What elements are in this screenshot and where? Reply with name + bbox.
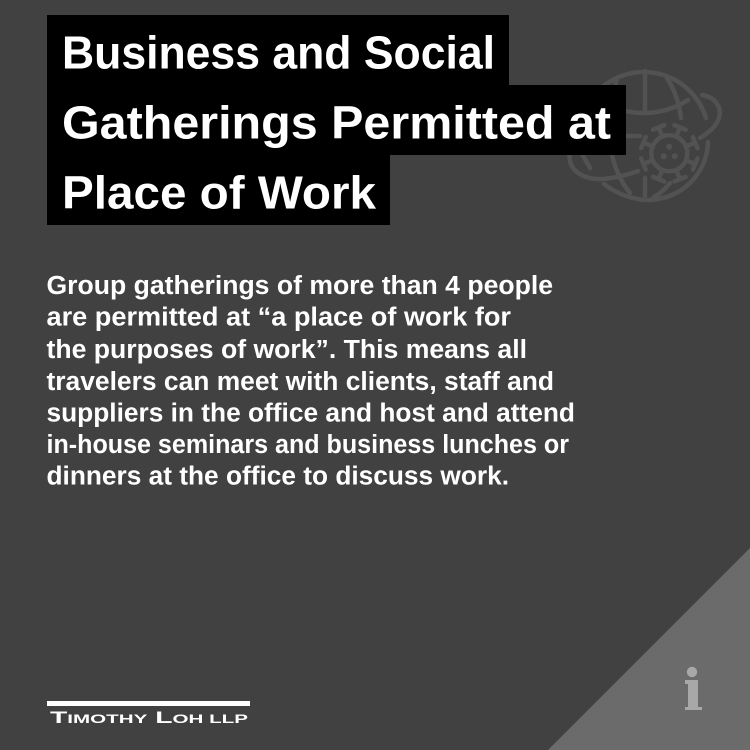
title: Business and Social: [62, 26, 495, 78]
body text: travelers can meet with clients, staff and: [46, 368, 554, 396]
icon: virus: [641, 125, 697, 181]
body text: the purposes of work”. This means all: [46, 336, 527, 364]
body text: are permitted at “a place of work for: [46, 304, 511, 332]
corner triangle: [548, 548, 750, 750]
body text: in-house seminars and business lunches or: [46, 431, 569, 459]
logo: Timothy Loh LLP: [47, 701, 250, 727]
body text: dinners at the office to discuss work.: [46, 462, 509, 490]
icon: globe with virus: [569, 71, 720, 200]
title: Gatherings Permitted at: [62, 96, 611, 148]
body text: Group gatherings of more than 4 people: [46, 272, 553, 300]
body text: suppliers in the office and host and attend: [46, 400, 575, 428]
title: Place of Work: [62, 166, 376, 218]
icon: info i: [685, 667, 702, 710]
logo: Timothy Loh LLP: T IMOTHY L OH LLP: [50, 709, 248, 727]
body text: [46, 272, 575, 490]
title: [47, 15, 626, 225]
